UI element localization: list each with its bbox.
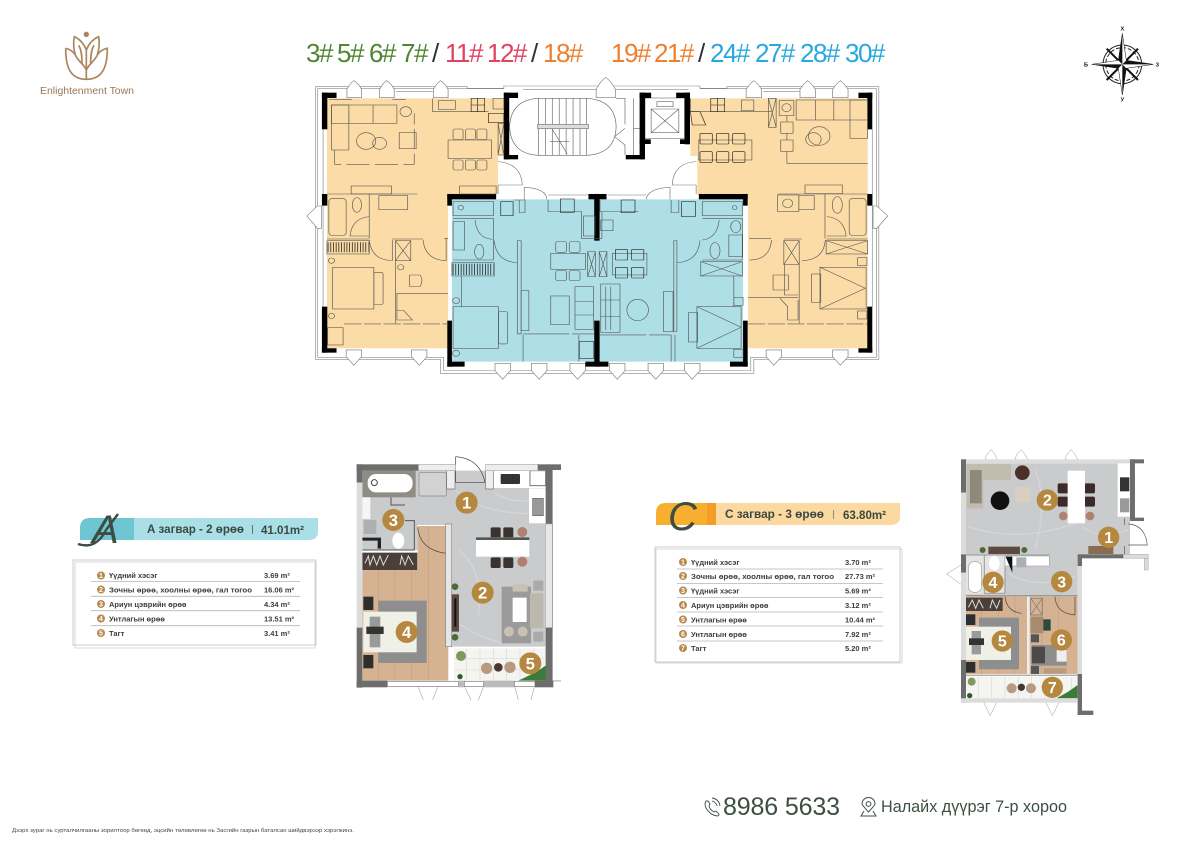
marble floor bbox=[966, 463, 1130, 597]
room number markers: 1 bbox=[462, 494, 471, 513]
stair core bbox=[510, 98, 640, 155]
type C area table: 5.69 m² bbox=[845, 586, 871, 596]
type A area table: 3 bbox=[99, 602, 103, 608]
type C area table: 4 bbox=[681, 602, 685, 610]
type C area table: Үүдний хэсэг bbox=[691, 586, 740, 596]
dining set bbox=[1058, 483, 1095, 507]
room number markers: 5 bbox=[998, 634, 1007, 651]
type A area table bbox=[73, 560, 316, 648]
type A heading bar bbox=[78, 508, 318, 552]
type A area table: 4 bbox=[99, 616, 103, 623]
type C heading bar: 63.80m² bbox=[843, 508, 886, 522]
kitchen bbox=[1118, 463, 1130, 517]
contact: address: Налайх дүүрэг 7-р хороо bbox=[881, 797, 1067, 816]
building outline bbox=[315, 86, 879, 373]
title: building numbers bbox=[306, 38, 886, 68]
type C area table: Ариун цэврийн өрөө bbox=[691, 601, 769, 610]
room number markers: 4 bbox=[989, 575, 998, 592]
room number markers: 4 bbox=[402, 623, 412, 642]
icon: compass rose bbox=[1084, 26, 1160, 104]
wardrobe bbox=[362, 553, 417, 570]
title: building numbers: 11# bbox=[445, 38, 484, 68]
type A area table: Ариун цэврийн өрөө bbox=[109, 600, 187, 609]
elevator bbox=[645, 98, 685, 139]
type A area table: Унтлагын өрөө bbox=[109, 614, 165, 624]
furniture: right orange unit bbox=[690, 98, 868, 324]
black structural walls bbox=[322, 93, 872, 367]
title: building numbers: 6# bbox=[369, 38, 397, 68]
room number markers: 2 bbox=[1043, 493, 1052, 510]
furniture: right blue unit bbox=[594, 200, 743, 362]
icon: compass rose: Б bbox=[1084, 62, 1088, 68]
title: building numbers: 21# bbox=[654, 38, 695, 68]
type C area table: 5 bbox=[681, 617, 685, 624]
room number markers: 2 bbox=[478, 584, 487, 603]
bath bbox=[966, 555, 1004, 594]
title: building numbers: / bbox=[432, 38, 440, 68]
icon: compass rose: У bbox=[1121, 98, 1125, 104]
type C area table: 2 bbox=[681, 574, 685, 580]
title: building numbers: / bbox=[698, 38, 706, 68]
type C area table: 3.70 m² bbox=[845, 558, 871, 567]
walls bbox=[947, 450, 1148, 716]
title: building numbers: 24# bbox=[710, 38, 751, 68]
study desk and second bed bbox=[1031, 617, 1043, 633]
room number markers: 3 bbox=[389, 511, 398, 530]
wood floor bedroom bbox=[362, 526, 448, 681]
furniture: left blue unit bbox=[452, 199, 595, 362]
bathroom fixtures bbox=[362, 471, 416, 497]
type A heading bar: А загвар - 2 өрөө bbox=[147, 524, 244, 536]
type C area table: 27.73 m² bbox=[845, 572, 876, 581]
balcony bbox=[966, 677, 1078, 698]
furniture: left orange unit bbox=[327, 98, 504, 345]
logo wordmark: Enlightenment Town bbox=[40, 85, 134, 97]
title: building numbers: 30# bbox=[845, 38, 886, 68]
room number markers: 5 bbox=[526, 654, 535, 673]
title: building numbers: 12# bbox=[487, 38, 528, 68]
type C area table: 3.12 m² bbox=[845, 601, 871, 610]
type C area table: 1 bbox=[681, 560, 685, 566]
room number markers: 1 bbox=[1104, 530, 1113, 547]
title: building numbers: 27# bbox=[755, 38, 796, 68]
sofa and coffee table bbox=[967, 464, 1011, 508]
type C area table: 10.44 m² bbox=[845, 616, 876, 624]
type A area table: 1 bbox=[99, 573, 103, 580]
type A area table: 16.06 m² bbox=[264, 586, 295, 594]
title: building numbers: 19# bbox=[611, 38, 652, 68]
icon: compass rose: Х bbox=[1120, 26, 1124, 32]
icon: tulip bbox=[66, 32, 107, 79]
room number markers bbox=[982, 489, 1119, 698]
plan: type C rendered unit bbox=[947, 450, 1148, 716]
title: building numbers: 28# bbox=[800, 38, 841, 68]
marble floor bbox=[362, 471, 546, 647]
room number markers bbox=[382, 492, 541, 674]
type A area table: 3.41 m² bbox=[264, 629, 290, 638]
media console bbox=[988, 547, 1020, 554]
entry door bbox=[456, 457, 485, 482]
type A heading bar: A bbox=[90, 508, 119, 552]
icon: phone bbox=[705, 798, 720, 816]
title: building numbers: 3# bbox=[306, 38, 334, 68]
wardrobes bbox=[966, 598, 1003, 611]
bed bbox=[378, 601, 427, 663]
type C heading bar: С загвар - 3 өрөө bbox=[725, 509, 824, 521]
apartments: orange units bbox=[327, 98, 868, 348]
type A area table: Тагт bbox=[109, 629, 125, 638]
title: building numbers: 18# bbox=[543, 38, 584, 68]
type C area table: Унтлагын өрөө bbox=[691, 630, 747, 639]
type C area table: Тагт bbox=[691, 644, 707, 653]
panel: type A bbox=[73, 508, 318, 648]
walls bbox=[357, 464, 561, 700]
type C area table: 6 bbox=[681, 632, 685, 638]
room number markers: 3 bbox=[1057, 574, 1066, 591]
type A area table: Зочны өрөө, хоолны өрөө, гал тогоо bbox=[109, 586, 252, 594]
floor plan: typical level bbox=[307, 77, 888, 379]
icon: location pin bbox=[861, 798, 876, 816]
type C area table bbox=[655, 547, 902, 663]
door and window swings bbox=[307, 77, 888, 379]
room number markers: 6 bbox=[1057, 633, 1066, 650]
type C area table: 3 bbox=[681, 588, 685, 595]
type A area table: 13.51 m² bbox=[264, 614, 295, 624]
type C area table: 7 bbox=[681, 646, 685, 652]
type A area table: 5 bbox=[99, 630, 103, 638]
type C area table: Зочны өрөө, хоолны өрөө, гал тогоо bbox=[691, 572, 834, 581]
type C area table: Үүдний хэсэг bbox=[691, 558, 740, 567]
apartments: blue units bbox=[452, 199, 743, 362]
type C area table: 5.20 m² bbox=[845, 644, 871, 653]
plan: type A rendered unit bbox=[357, 457, 561, 700]
corridor entrance doors bbox=[498, 162, 696, 199]
type C area table: Унтлагын өрөө bbox=[691, 616, 747, 624]
title: building numbers: 7# bbox=[401, 38, 429, 68]
kitchen bbox=[487, 471, 546, 488]
logo: Enlightenment Town bbox=[40, 32, 134, 97]
room number markers: 7 bbox=[1048, 680, 1057, 697]
title: building numbers: / bbox=[531, 38, 539, 68]
master bed bbox=[979, 618, 1019, 669]
footnote: Дээрх зураг нь сурталчилгааны зорилтоор бөгөөд, эцсийн төлөвлөгөө нь Засгийн газрын баталсан шийдвэрээр хэрэгжинэ. bbox=[12, 827, 354, 834]
dining set bbox=[491, 527, 513, 568]
contact: phone: 8986 5633 bbox=[723, 793, 840, 821]
type C heading bar bbox=[656, 495, 900, 539]
type A heading bar: 41.01m² bbox=[261, 523, 304, 537]
type A area table: Үүдний хэсэг bbox=[109, 571, 158, 580]
panel: type C bbox=[655, 495, 902, 663]
living set bbox=[502, 587, 531, 643]
type A area table: 3.69 m² bbox=[264, 571, 290, 580]
type C heading bar: C bbox=[668, 495, 698, 539]
type A area table: 4.34 m² bbox=[264, 600, 290, 609]
type A area table: 2 bbox=[99, 587, 103, 594]
entry bbox=[1124, 518, 1147, 554]
wood floor bedrooms bbox=[966, 597, 1078, 674]
type C area table: 7.92 m² bbox=[845, 630, 871, 639]
icon: compass rose: З bbox=[1156, 62, 1160, 68]
title: building numbers: 5# bbox=[337, 38, 365, 68]
balcony bbox=[454, 648, 546, 681]
